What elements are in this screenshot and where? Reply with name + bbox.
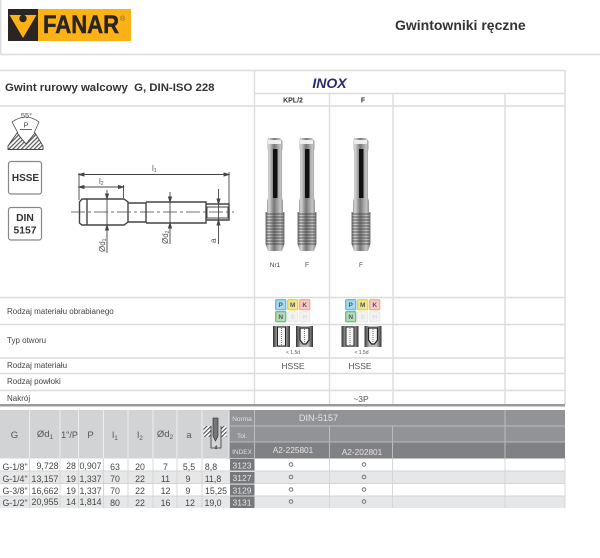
- table header labels: 1"/P: [61, 430, 78, 440]
- tap labels: F: [359, 262, 363, 269]
- data rows: 1,337: [79, 474, 102, 484]
- data rows: 20,955: [32, 497, 59, 507]
- table header labels: G: [11, 430, 18, 441]
- index column: 3127: [233, 473, 252, 483]
- data rows: 13,157: [32, 474, 59, 484]
- index column: 3123: [233, 460, 252, 470]
- row labels: Rodzaj powłoki: [7, 377, 61, 386]
- table header labels: 2: [170, 434, 174, 441]
- material groups: column 1: [276, 300, 310, 322]
- data rows: 9,728: [36, 461, 59, 471]
- table header labels: l: [112, 430, 114, 441]
- table header labels: 2: [139, 435, 143, 442]
- data rows: 9: [186, 486, 191, 496]
- tap labels: [270, 262, 363, 269]
- data rows: 1,814: [79, 497, 102, 507]
- row labels: [7, 307, 114, 403]
- page header frame: [1, 0, 600, 54]
- row labels: Typ otworu: [7, 336, 46, 345]
- material and chamfer values: ~3P: [353, 394, 369, 404]
- table header labels: 1: [114, 435, 118, 442]
- norm and index values: [273, 413, 383, 457]
- title: Gwintowniki ręczne: [395, 17, 526, 33]
- index column: [230, 459, 254, 508]
- row labels: Rodzaj materiału obrabianego: [7, 307, 114, 316]
- drawing dimension labels: [98, 164, 218, 252]
- data rows: G-3/8": [2, 486, 28, 496]
- heading: INOX: INOX: [312, 75, 348, 91]
- data rows: 22: [135, 498, 145, 508]
- data rows: 70: [110, 474, 120, 484]
- data rows: 11: [161, 474, 170, 484]
- data rows: 22: [135, 486, 145, 496]
- drawing dimension labels: 2: [101, 181, 104, 187]
- tap labels: F: [305, 262, 309, 269]
- icon: 55 degree thread profile: P: [23, 120, 29, 130]
- availability markers: [289, 463, 366, 503]
- data rows: 1,337: [79, 486, 102, 496]
- technical drawing of tap: [71, 172, 234, 253]
- data rows: G-1/4": [2, 474, 28, 484]
- norm labels: Norma: [232, 416, 252, 423]
- data rows: 7: [163, 462, 168, 472]
- logo: FANAR: ®: [120, 15, 126, 23]
- drawing dimension labels: a: [209, 238, 218, 243]
- icon: 55 degree thread profile: [8, 111, 43, 150]
- data rows: 11,8: [205, 474, 221, 484]
- hole types: column 1: [273, 326, 313, 356]
- drawing dimension labels: l: [99, 177, 101, 186]
- data rows: 63: [110, 462, 120, 472]
- column labels: F: [361, 98, 366, 104]
- badge: HSSE: HSSE: [12, 173, 39, 184]
- badge: DIN 5157: 5157: [14, 226, 37, 236]
- material groups: column 2: [346, 300, 380, 322]
- norm and index values: A2-225801: [273, 445, 314, 455]
- material and chamfer values: HSSE: [281, 361, 305, 371]
- data rows: 8,8: [205, 462, 217, 472]
- table grid: [0, 70, 565, 405]
- table header labels: [11, 429, 192, 442]
- drawing dimension labels: l: [152, 164, 154, 173]
- row labels: Rodzaj materiału: [7, 361, 67, 370]
- table header labels: Ød: [37, 429, 50, 440]
- data rows: G-1/8": [2, 462, 28, 472]
- data rows: 19,0: [204, 498, 222, 508]
- badge: DIN 5157: [8, 208, 42, 240]
- data rows: 19: [66, 474, 76, 484]
- table header labels: 1: [50, 434, 54, 441]
- drawing dimension labels: 2: [165, 230, 171, 233]
- logo: FANAR: [8, 9, 131, 41]
- data rows: 15,25: [205, 486, 227, 496]
- norm labels: Tol.: [237, 433, 247, 440]
- norm labels: [232, 416, 253, 456]
- table header labels: Ød: [157, 429, 170, 440]
- norm and index values: A2-202801: [342, 447, 383, 457]
- table header labels: l: [137, 430, 139, 441]
- index column: 3131: [233, 498, 252, 508]
- badge: DIN 5157: DIN: [16, 213, 34, 224]
- norm and index values: DIN-5157: [299, 413, 338, 423]
- data rows: 12: [185, 498, 195, 508]
- tap labels: Nr1: [270, 262, 281, 269]
- drawing dimension labels: Ød: [98, 241, 107, 252]
- data rows: 19: [66, 486, 76, 496]
- data table header: [0, 410, 565, 458]
- drawing dimension labels: 1: [154, 168, 157, 174]
- tap photo: F: [352, 138, 370, 251]
- data rows: 80: [110, 498, 120, 508]
- table header labels: a: [186, 430, 192, 441]
- logo: FANAR: FANAR: [43, 11, 119, 39]
- data rows: 22: [135, 474, 145, 484]
- tap photo: KPL/2 F: [298, 138, 316, 251]
- data rows: 0,907: [79, 461, 102, 471]
- table header labels: P: [87, 430, 94, 441]
- data rows: 20: [135, 462, 145, 472]
- icon: 55 degree thread profile: 55°: [21, 111, 32, 120]
- badge: HSSE: [8, 162, 42, 194]
- data rows: 5,5: [183, 462, 195, 472]
- drawing dimension labels: Ød: [161, 233, 170, 244]
- norm labels: INDEX: [232, 449, 253, 456]
- hole types: column 2: [342, 326, 382, 356]
- drawing dimension labels: 1: [102, 238, 108, 241]
- data rows: 9: [186, 474, 191, 484]
- data rows: 14: [66, 497, 76, 507]
- index column: 3129: [233, 486, 252, 496]
- tap photo: KPL/2 Nr1: [266, 138, 284, 251]
- column labels: [283, 98, 366, 104]
- data rows: 28: [66, 461, 76, 471]
- data rows: [0, 459, 565, 508]
- data rows: 16: [161, 498, 170, 508]
- data rows: 12: [161, 486, 170, 496]
- row labels: Nakrój: [7, 394, 30, 403]
- heading: thread type: Gwint rurowy walcowy G, DIN-ISO 228: [5, 82, 215, 94]
- icon: drill diameter: d: [215, 445, 218, 451]
- data rows: G-1/2": [2, 498, 28, 508]
- material and chamfer values: HSSE: [348, 361, 372, 371]
- icon: drill diameter: [204, 418, 226, 451]
- material and chamfer values: [281, 361, 372, 404]
- column labels: KPL/2: [283, 98, 303, 104]
- data rows: 70: [110, 486, 120, 496]
- data rows: 16,662: [32, 486, 59, 496]
